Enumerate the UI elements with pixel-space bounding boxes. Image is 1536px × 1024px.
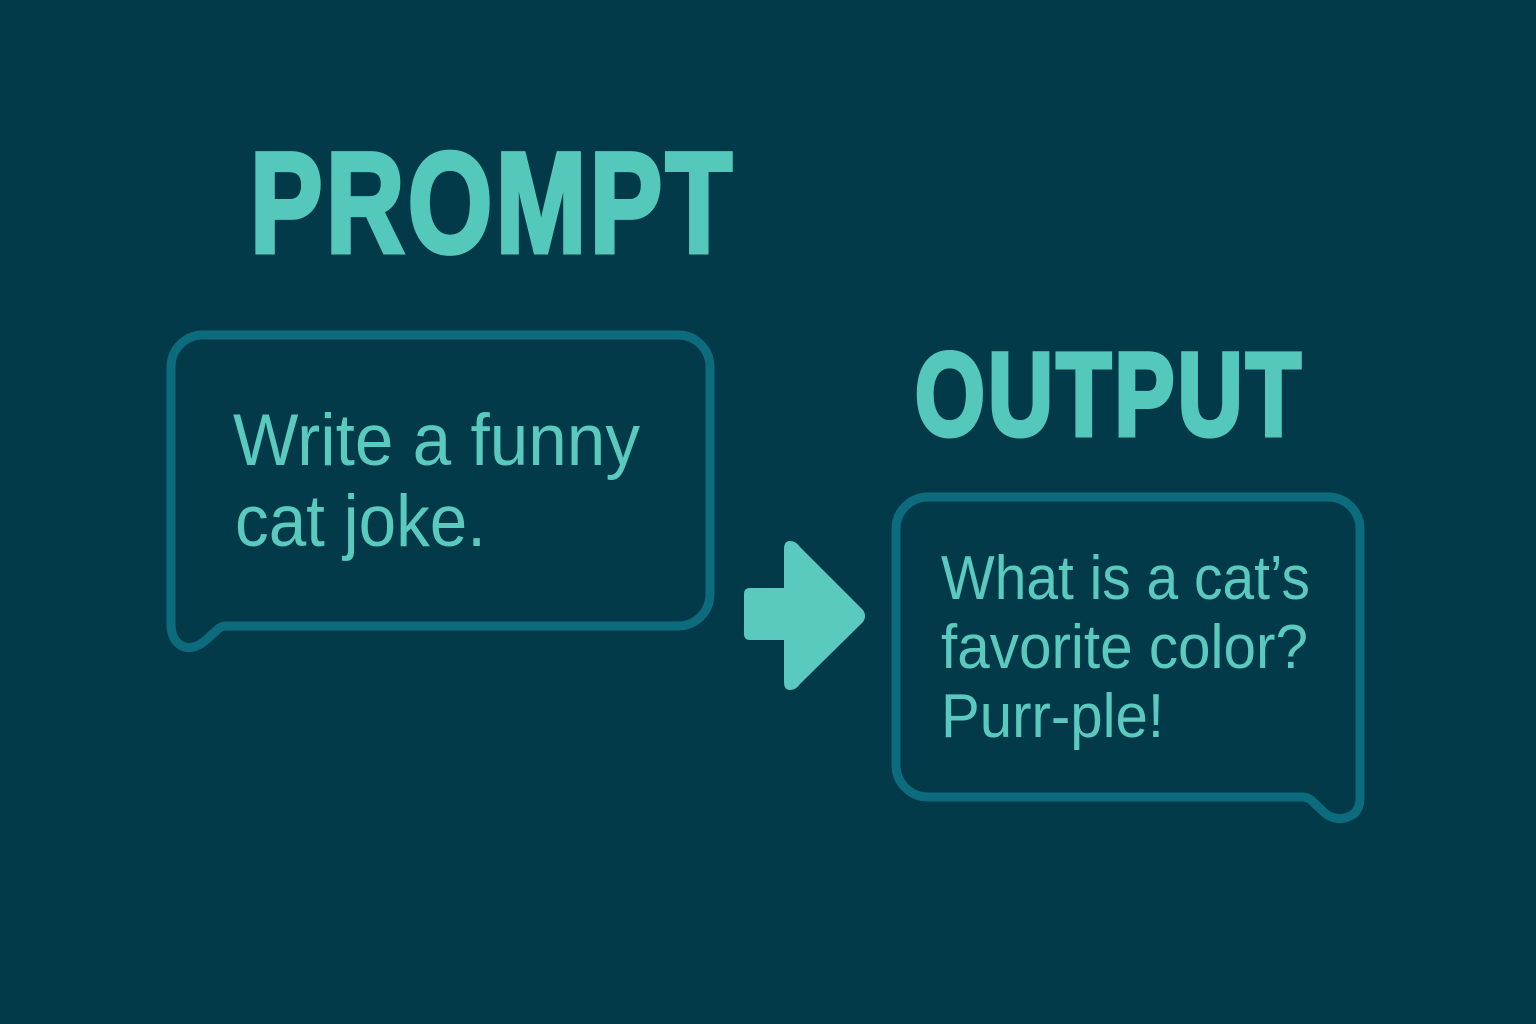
bubble outline: output (896, 497, 1360, 819)
output text: favorite color? (941, 613, 1308, 682)
bubble outline: prompt (171, 335, 710, 648)
prompt text: cat joke. (235, 481, 486, 562)
panel: prompt speech bubble (171, 335, 710, 648)
panel: output speech bubble (896, 497, 1360, 819)
arrow: prompt to output (744, 541, 865, 690)
heading: PROMPT: PROMPT (250, 123, 735, 282)
heading: OUTPUT: OUTPUT (915, 329, 1304, 461)
prompt text: Write a funny (233, 400, 640, 481)
output text: What is a cat’s (941, 544, 1310, 613)
output text: Purr-ple! (941, 682, 1164, 751)
